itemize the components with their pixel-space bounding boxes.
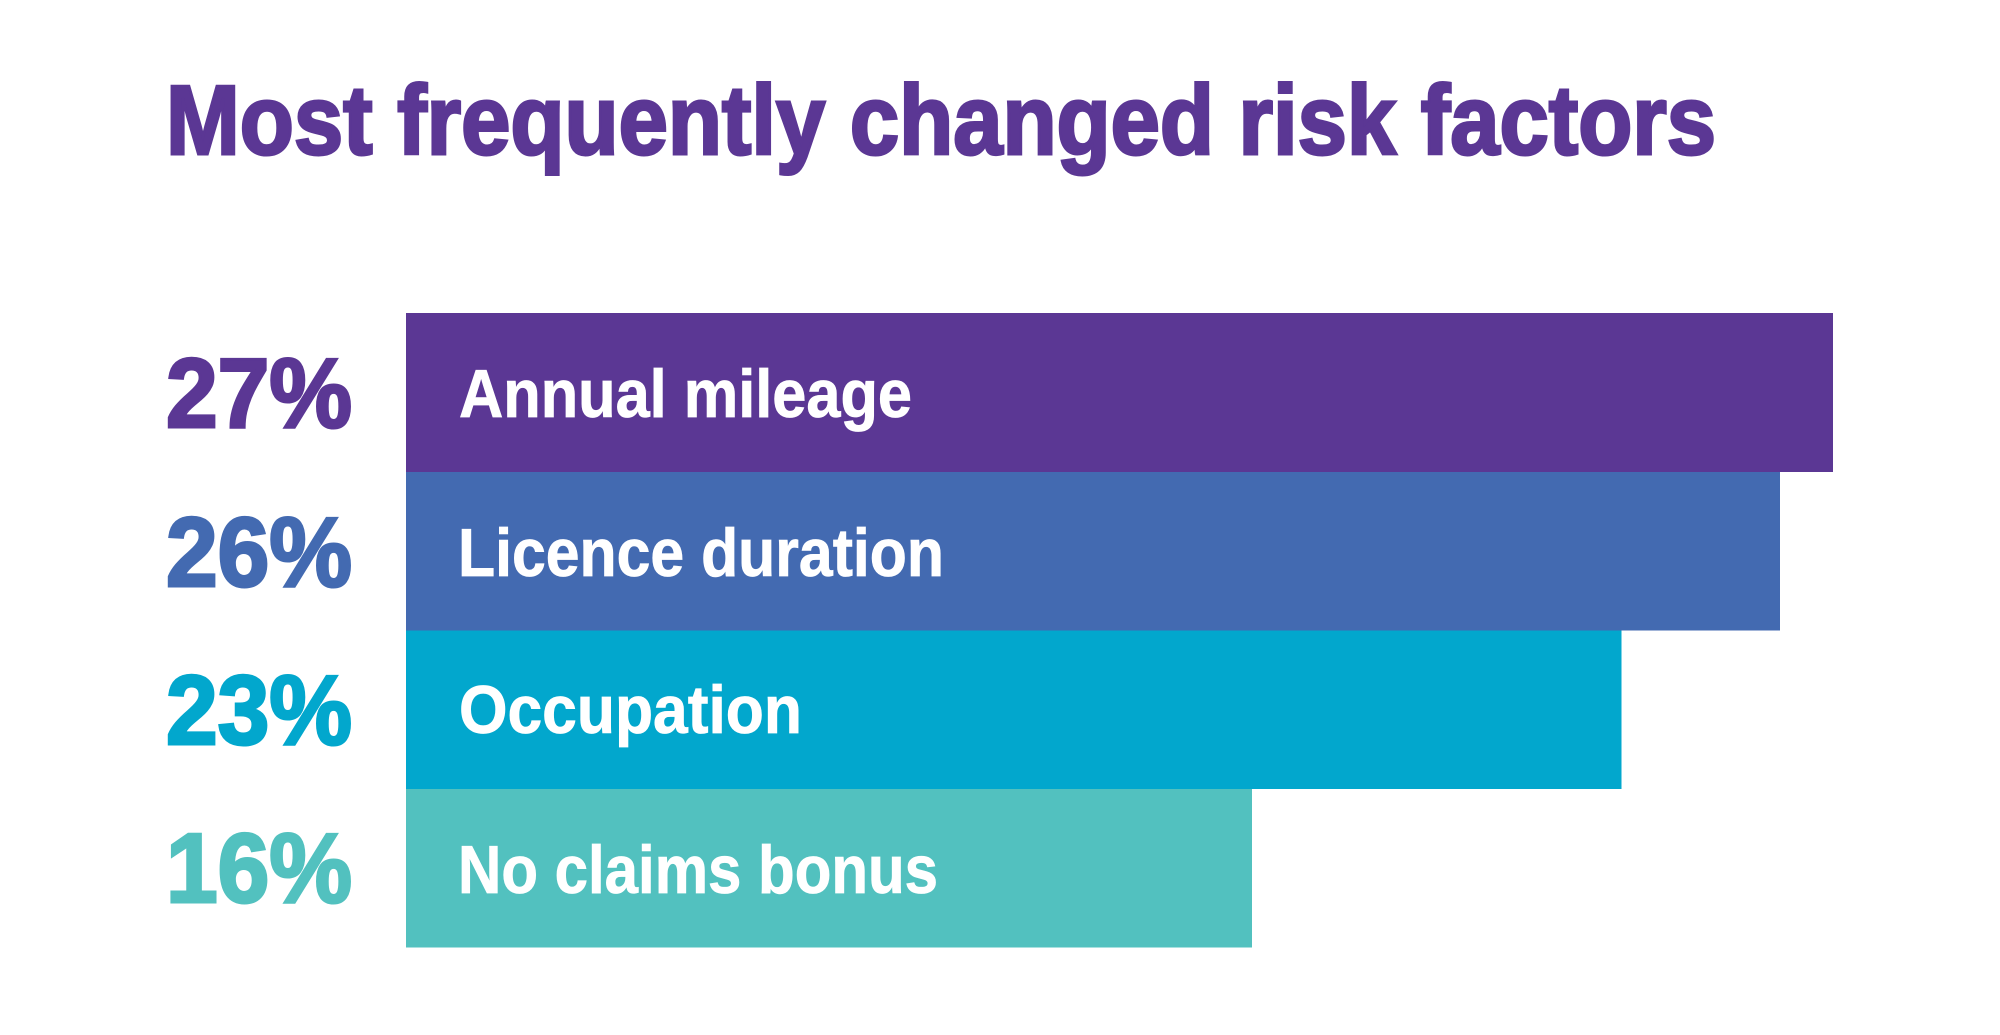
label: annual mileage: Annual mileage bbox=[459, 356, 912, 432]
bar: licence duration bbox=[406, 472, 1780, 630]
bar: annual mileage bbox=[406, 313, 1833, 472]
value: 26%: 26% bbox=[166, 497, 352, 607]
row: annual mileage bbox=[166, 313, 1833, 472]
row: licence duration bbox=[166, 472, 1780, 630]
value: 23%: 23% bbox=[166, 655, 352, 765]
row: occupation bbox=[166, 630, 1622, 789]
value: 27%: 27% bbox=[166, 338, 352, 448]
label: no claims bonus: No claims bonus bbox=[458, 832, 938, 908]
bar: occupation bbox=[406, 630, 1622, 789]
title: Most frequently changed risk factors bbox=[166, 65, 1716, 175]
bar chart bbox=[166, 313, 1833, 948]
bar: no claims bonus bbox=[406, 789, 1252, 948]
value: 16%: 16% bbox=[166, 813, 352, 923]
label: licence duration: Licence duration bbox=[458, 515, 944, 591]
label: occupation: Occupation bbox=[459, 672, 802, 748]
row: no claims bonus bbox=[166, 789, 1252, 948]
